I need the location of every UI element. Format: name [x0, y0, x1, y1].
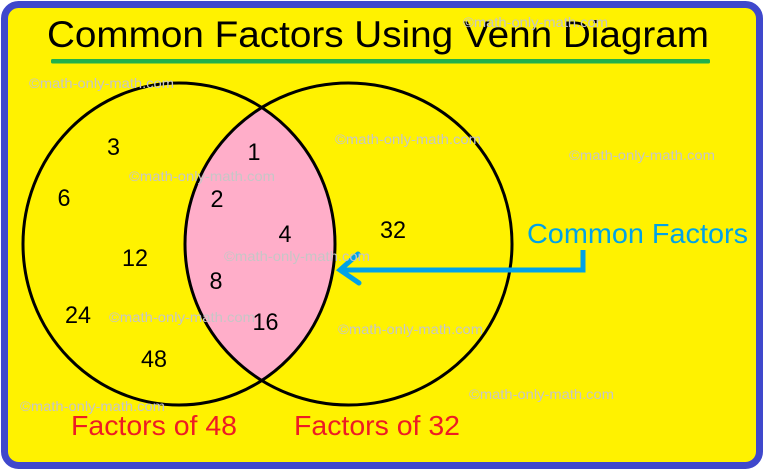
common factors numbers: 8	[210, 268, 222, 295]
intersection: common factors region	[185, 108, 335, 380]
title underline	[51, 59, 710, 64]
numbers only in factors of 48: 48	[141, 346, 167, 373]
watermarks: ©math-only-math.com	[29, 75, 174, 91]
watermarks: ©math-only-math.com	[335, 131, 481, 147]
arrow: to common factors region	[340, 250, 583, 283]
watermarks: ©math-only-math.com	[129, 168, 275, 184]
circle: factors of 32	[185, 83, 512, 405]
label: common factors: Common Factors	[527, 218, 748, 249]
numbers only in factors of 48	[58, 134, 167, 373]
common factors numbers: 16	[252, 309, 278, 336]
numbers only in factors of 48: 3	[107, 134, 120, 161]
watermarks: ©math-only-math.com	[109, 309, 255, 325]
label: factors of 48: Factors of 48	[71, 410, 237, 441]
number only in factors of 32: 32	[380, 217, 406, 244]
venn diagram	[23, 83, 512, 405]
watermarks: ©math-only-math.com	[20, 398, 165, 414]
watermarks	[20, 14, 715, 414]
title: Common Factors Using Venn Diagram	[47, 14, 709, 55]
common factors numbers: 2	[210, 186, 224, 213]
common factors numbers: 1	[248, 139, 260, 166]
watermarks: ©math-only-math.com	[463, 14, 608, 30]
watermarks: ©math-only-math.com	[338, 321, 483, 337]
circle: factors of 48	[23, 83, 335, 405]
label: factors of 32: Factors of 32	[294, 410, 460, 441]
numbers only in factors of 48: 24	[65, 302, 91, 329]
watermarks: ©math-only-math.com	[224, 248, 370, 264]
watermarks: ©math-only-math.com	[569, 147, 715, 163]
common factors numbers: 4	[278, 221, 292, 248]
numbers only in factors of 48: 12	[122, 245, 148, 272]
watermarks: ©math-only-math.com	[469, 386, 614, 402]
common factors numbers	[210, 139, 292, 336]
numbers only in factors of 48: 6	[58, 185, 70, 212]
